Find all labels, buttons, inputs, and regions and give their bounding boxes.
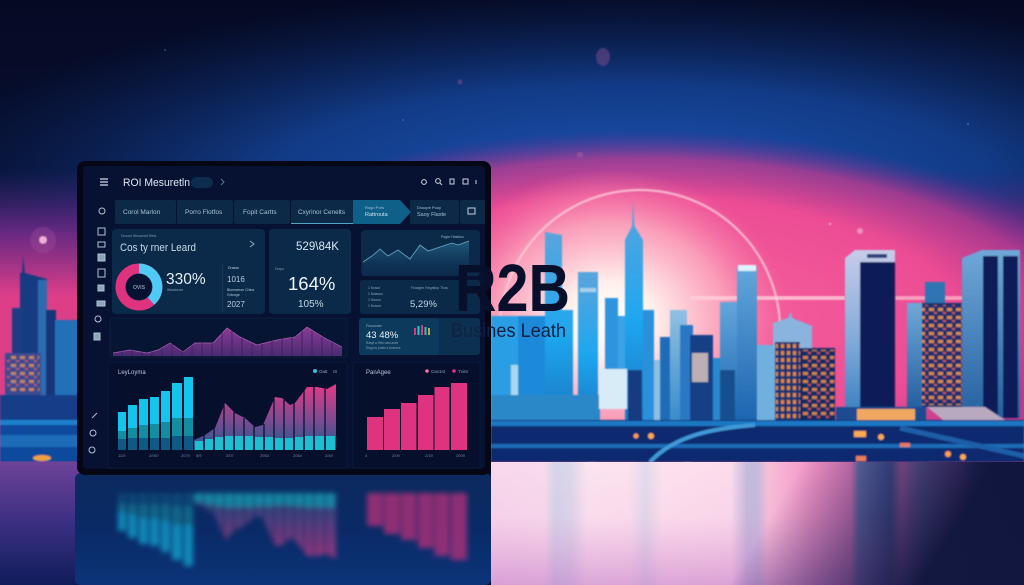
legend (313, 369, 317, 373)
panel: left bottom charts: LeyLoyma (118, 370, 146, 376)
horizontal light streak (690, 296, 963, 300)
floor (0, 462, 1024, 585)
tablet screen (83, 166, 485, 469)
bar chart: cyan stacked (118, 377, 193, 450)
axis labels: 4 (365, 453, 368, 458)
panel: KPI: 164% (288, 273, 335, 294)
panel: stat (360, 280, 480, 314)
panel: stat: 5,29% (410, 299, 437, 310)
panel: stat: 1 Nosut (368, 286, 380, 290)
side figures: 2027 (227, 300, 245, 309)
panel: right bottom chart: Cav1st (431, 369, 446, 374)
legend (425, 369, 429, 373)
panel: stat: 1 Nosue (368, 304, 381, 308)
bar chart: pink (367, 383, 467, 450)
tabs: Cxyrinor Cenelts (298, 209, 346, 216)
tabs: Fopit Cartts (243, 209, 277, 216)
axis labels: 2/19 (425, 453, 434, 458)
tablet (77, 161, 491, 475)
axis labels (365, 453, 466, 458)
tablet frame (77, 161, 491, 475)
icon: menu (100, 179, 108, 185)
tablet reflection (75, 473, 491, 585)
floating orbs and stars (30, 48, 969, 253)
axis labels: 2/097 (149, 453, 160, 458)
tabs: Saoy Flaxte (417, 212, 446, 218)
logo: R2B: R2B (455, 251, 570, 326)
panel: stat: 1 Nsoso (368, 298, 381, 302)
tabs: Rattrouta (365, 212, 389, 218)
tabs: Corol Marlon (123, 209, 161, 216)
panel: left bottom charts: IS (333, 369, 337, 374)
axis labels: 2/49 (325, 453, 334, 458)
panel: right bottom chart: PanAgee (366, 370, 391, 376)
panel: mini stat: Rasyf a Hrto nast aortt (366, 341, 398, 345)
panel: KPI: 105% (298, 299, 324, 310)
skyline right (491, 200, 1024, 462)
side figures: 1016 (227, 275, 245, 284)
far buildings (491, 200, 812, 423)
highway (491, 420, 1024, 462)
sidebar icons (89, 208, 105, 453)
title pill (191, 177, 213, 188)
panel: mini stat: Flooooner (366, 324, 383, 328)
bottom icons (92, 413, 97, 418)
donut chart (120, 268, 158, 306)
tabs (115, 200, 485, 224)
axis labels (118, 453, 334, 458)
panel: cost per lead: Dovset Wnoperet Rets (121, 234, 156, 238)
windows tower (907, 282, 962, 408)
glass reflection (599, 369, 627, 409)
panel: right bottom chart (353, 362, 480, 468)
tabs: Rogo Pors (365, 205, 384, 210)
lit podiums (836, 407, 926, 421)
axis labels: 2079 (181, 453, 191, 458)
area chart: pink and teal (194, 384, 336, 450)
heading: Cos ty rner Leard (120, 242, 196, 254)
lit windows building (775, 342, 835, 424)
top bar (100, 177, 476, 189)
axis labels: 11/9 (118, 453, 126, 458)
panel: line chart: Pagte Hastitos (441, 235, 464, 239)
skyline left (0, 255, 80, 462)
panel: cost per lead (112, 229, 265, 314)
panel: cost per lead: Woutrover (167, 288, 184, 292)
panel: mini stat: 43 48% (366, 330, 399, 341)
panel: mini stat: Dego to pnstn s bceroxe (366, 346, 401, 350)
tabs: Dxoope Pouy (417, 205, 441, 210)
panel: line chart (361, 230, 480, 276)
axis labels: 2/07 (226, 453, 235, 458)
panel: right bottom chart: Txint (458, 369, 469, 374)
icons: toolbar (221, 179, 476, 185)
panel: purple area chart (110, 318, 347, 357)
side figures: Blonnarroe Chtos (227, 288, 254, 292)
reflected charts (118, 493, 467, 566)
side figures (222, 264, 254, 312)
axis labels: 5/9 (196, 453, 202, 458)
tabs: Porro Flotfos (185, 209, 223, 216)
glowing arc behind skyline (500, 190, 780, 470)
panel: mini stat (359, 318, 480, 355)
panel: KPI: Dwpo (275, 267, 284, 271)
side figures: Grtonge (227, 293, 240, 297)
axis labels: 2/09 (392, 453, 401, 458)
axis labels: 2064 (293, 453, 303, 458)
panel: stat: 1 Ndasno (368, 292, 383, 296)
panel: left bottom charts (108, 362, 347, 468)
panel: KPI: 529\84K (296, 241, 339, 253)
panel: left bottom charts: Oatt (319, 369, 328, 374)
dashboard title: ROI Mesuretln (123, 177, 190, 189)
axis labels: 2009 (456, 453, 466, 458)
donut chart: OVIS (133, 285, 146, 291)
panel: stat: Flowgen Regatlop Thas (411, 286, 448, 290)
dark tower (845, 250, 895, 408)
donut value: 330% (166, 271, 206, 288)
mini bars (414, 328, 416, 335)
side figures: Drasse (228, 266, 239, 270)
logo tagline: Busines Leath (451, 321, 566, 342)
far right tower (962, 250, 1020, 418)
active tab arrow (353, 200, 411, 224)
panel: KPI (269, 229, 351, 314)
icon: table (468, 208, 475, 214)
axis labels: 2953 (260, 453, 270, 458)
background sky (0, 0, 1024, 462)
